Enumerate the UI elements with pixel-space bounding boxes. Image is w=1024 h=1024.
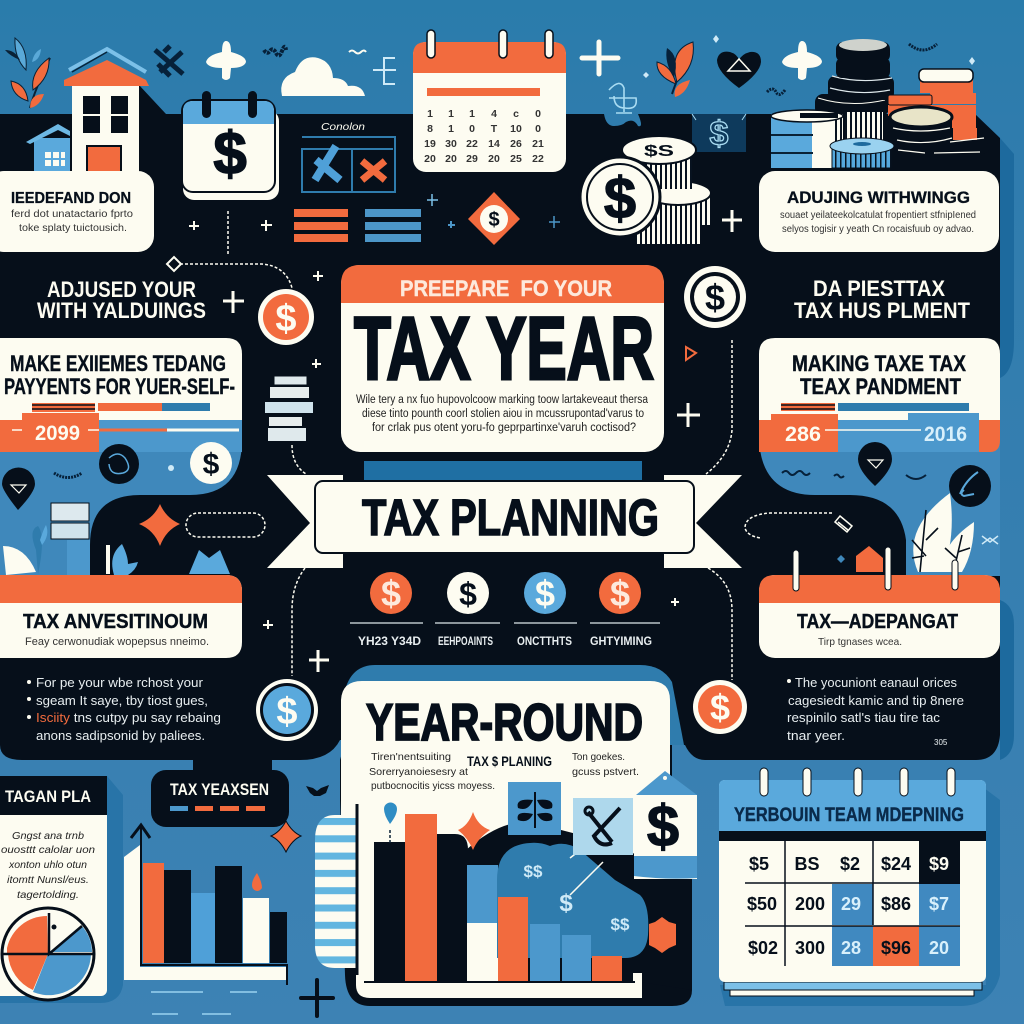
labels: ONCTTHTS	[517, 634, 572, 648]
bullet list right	[787, 675, 964, 747]
banner: tax planning	[267, 461, 742, 568]
subheading: TAX $ PLANING	[467, 753, 552, 769]
coin: orange: $	[381, 573, 401, 614]
panel: adjusting withholding: selyos togisir y yeath Cn rocaisfuub oy advao.	[782, 224, 974, 235]
icon: orange dollar coin: $	[275, 298, 297, 340]
icon: white dollar circle	[190, 442, 232, 484]
calendar: year-round table	[719, 768, 1000, 1006]
table values: $9	[929, 854, 949, 874]
icon: cloud	[281, 57, 365, 96]
heading: TAX ANVESITINOUM	[23, 611, 208, 633]
heading: MAKE EXIIEMES TEDANG	[10, 351, 226, 376]
heading: TAGAN PLA	[5, 787, 91, 806]
icon: orange four-point star	[139, 504, 180, 546]
icon: small squiggle right	[349, 50, 366, 54]
bar: year marker	[0, 403, 239, 452]
coin: white: $	[459, 576, 477, 612]
text block: xonton uhlo otun	[8, 859, 87, 871]
labels	[358, 634, 652, 648]
text block: Gngst ana trnb	[12, 830, 84, 842]
icon: orange dollar coin right: $	[710, 687, 730, 728]
chart: bars with cloud	[356, 802, 692, 998]
table values: 28	[841, 938, 861, 958]
icon: orange diamond dollar	[468, 192, 520, 245]
icon: large house	[64, 49, 149, 175]
calendar: top month: T	[491, 123, 498, 135]
icon: right coin stacks	[771, 39, 990, 168]
icon: small dots	[643, 35, 975, 78]
icon: small star	[271, 821, 301, 852]
text block left	[369, 751, 495, 792]
table values: BS	[794, 854, 820, 874]
icon: stripe block	[315, 815, 357, 968]
icon: small orange house	[856, 546, 883, 572]
banner: tax planning: TAX PLANNING	[362, 489, 659, 546]
heading: adjusted your: WITH YALDUINGS	[37, 298, 206, 323]
text block: for crlak pus otent yoru-fo geprpartinxe'varuh coctisod?	[372, 422, 636, 434]
small lines	[151, 992, 257, 1014]
icon: dollar calendar: $	[213, 120, 247, 187]
bar: year marker: 286	[785, 423, 821, 446]
table values: 200	[795, 894, 825, 914]
heading: TAX—ADEPANGAT	[797, 611, 958, 633]
icon: small blue dot	[837, 555, 845, 563]
calendar: top month: 1	[469, 108, 475, 120]
bar: year marker: 2016	[924, 423, 967, 446]
icon: orange dollar coin right	[693, 680, 747, 734]
connector lines	[180, 211, 832, 680]
icon: dollar tile: $	[710, 115, 729, 153]
calendar: top month: 4	[491, 108, 497, 120]
chart: bar chart left	[124, 821, 301, 985]
text block: souaet yeilateekolcatulat fropentiert stfnipIened	[780, 210, 976, 221]
calendar: top month: 1	[448, 108, 454, 120]
table cells	[832, 841, 960, 966]
icon: leaves in dark	[108, 544, 230, 575]
bars: orange and blue lists	[294, 209, 421, 242]
panel: comparison check and cross	[302, 122, 395, 192]
icon: scissors tile	[573, 798, 633, 855]
text block right: gcuss pstvert.	[572, 766, 639, 778]
icon: dark pin	[858, 442, 892, 486]
heading: MAKING TAXE TAX	[792, 351, 966, 376]
calendar: top month: 25	[510, 153, 522, 165]
panel: tax yeaxsen label	[151, 770, 289, 827]
icon: white leaves	[912, 493, 974, 572]
calendar: top month: 22	[466, 138, 478, 150]
calendar: top month: 14	[488, 138, 500, 150]
bullet list left: anons sadipsonid by paliees.	[36, 728, 205, 743]
icon: blue dollar coin: $	[276, 691, 298, 733]
stack: black coins	[815, 39, 894, 142]
heading: adjusted your	[37, 277, 206, 323]
coin: orange	[370, 572, 412, 614]
heading: IEEDEFAND DON	[11, 190, 131, 207]
coin: orange	[599, 572, 641, 614]
coin: blue	[524, 572, 566, 614]
icon: orange diamond dollar: $	[488, 209, 500, 231]
icon: plus sparkle	[582, 42, 618, 74]
coin: orange: $	[610, 573, 630, 614]
icon: dollar tile	[596, 114, 746, 153]
bar: year marker	[759, 403, 1000, 452]
text block: ouosttt calolar uon	[1, 844, 95, 856]
calendar: top month: 22	[532, 153, 544, 165]
calendar: top month: 21	[532, 138, 544, 150]
icon: light line glyph	[609, 83, 636, 113]
text block: Tirp tgnases wcea.	[818, 636, 902, 648]
icon: bat shape	[306, 785, 329, 796]
bullet list right: 305	[934, 738, 948, 747]
bullet list left: For pe your wbe rchost your	[36, 675, 204, 690]
bar: year marker: 2099	[35, 422, 80, 445]
calendar: top month: 0	[535, 123, 541, 135]
bullet list left	[27, 675, 221, 743]
coin: blue: $	[535, 573, 555, 614]
table values: $86	[881, 894, 911, 914]
text block: Feay cerwonudiak wopepsus nneimo.	[25, 636, 209, 648]
chart: bars with cloud: $$	[524, 862, 543, 881]
panel: tax investment left	[0, 575, 242, 658]
calendar: top month	[413, 30, 566, 172]
icon: euro-like glyph	[373, 58, 396, 84]
panel: making tax payment right: TEAX PANDMENT	[800, 374, 961, 399]
panel: making tax payment right	[759, 338, 1000, 576]
calendar: top month: 8	[427, 123, 433, 135]
calendar: top month: 29	[466, 153, 478, 165]
icon: orange leaf sprig	[657, 42, 693, 97]
icon: orange badge	[649, 917, 676, 953]
icon: small orange triangle	[686, 347, 696, 360]
heading: adjusted your: ADJUSED YOUR	[47, 277, 196, 302]
coin: white	[447, 572, 489, 614]
panel: adjusting withholding	[759, 171, 999, 252]
icon: dark cross	[301, 980, 333, 1016]
table values: $02	[748, 938, 778, 958]
calendar: top month: c	[513, 108, 519, 120]
bullet list left: sgeam It saye, tby tiost gues,	[36, 693, 208, 708]
stack: orange coins	[888, 69, 977, 140]
icon: small pin	[384, 802, 397, 843]
bullet list right: The yocuniont eanaul orices	[795, 675, 957, 690]
table values: 29	[841, 894, 861, 914]
icon: plant tile	[508, 782, 561, 835]
heading: tax payment: TAX HUS PLMENT	[794, 298, 971, 323]
icon: orange star	[458, 812, 490, 850]
table values: 300	[795, 938, 825, 958]
table values: 20	[929, 938, 949, 958]
calendar: top month: 20	[445, 153, 457, 165]
panel: info card top-left	[0, 171, 154, 252]
bullet list left: Isciity tns cutpy pu say rebaing	[36, 710, 221, 725]
text block	[1, 830, 95, 901]
calendar: top month: 0	[535, 108, 541, 120]
icon: outlined dollar coin	[684, 266, 746, 328]
labels: GHTYIMING	[590, 634, 652, 648]
table values: $24	[881, 854, 911, 874]
icon: left leaf sprig	[5, 38, 50, 108]
table values: $96	[881, 938, 911, 958]
heading: ADUJING WITHWINGG	[787, 188, 970, 207]
icon: small diamond marker	[167, 257, 181, 271]
icon: price tag dollar: $	[647, 794, 679, 859]
icon: coin stack with dollar: $S	[644, 143, 674, 160]
stack: front black coin	[890, 107, 990, 156]
text block: diese tinto pounth coorl stolien aiou in mcussrupontad'varus to	[362, 408, 644, 420]
table values: $7	[929, 894, 949, 914]
calendar: top month: 0	[469, 123, 475, 135]
labels: EEHPOAINTS	[438, 634, 493, 648]
bullet list right: tnar yeer.	[787, 728, 845, 743]
icon: dark circle	[99, 444, 139, 484]
text block right	[572, 751, 639, 778]
text block	[356, 394, 649, 434]
calendar: top month: 1	[448, 123, 454, 135]
icon: small blue house	[26, 124, 70, 172]
icon: white sparkle shape right	[782, 41, 822, 80]
icon: white dollar circle: $	[203, 448, 220, 481]
icon: blue dollar coin	[256, 679, 318, 741]
calendar: top month: 30	[445, 138, 457, 150]
panel: left plant and block	[3, 503, 230, 575]
table values: $50	[747, 894, 777, 914]
panel: tax yeaxsen label: TAX YEAXSEN	[170, 780, 269, 799]
panel: tax adepangat right	[759, 547, 1000, 658]
icon row: four dollar coins with labels	[350, 572, 660, 648]
panel: bottom-left pie card	[0, 776, 123, 1003]
rings	[760, 768, 955, 796]
calendar: top month: 26	[510, 138, 522, 150]
heading: YERBOUIN TEAM MDEPNING	[734, 805, 964, 826]
icon: coin stack with dollar	[580, 136, 711, 244]
icon: tiny coin stack	[265, 376, 313, 441]
icon: flame	[252, 873, 262, 891]
icon: dark circle with key	[949, 465, 991, 507]
icon: orange dollar coin	[258, 289, 314, 345]
heading: YEAR-ROUND	[366, 694, 643, 752]
calendar: top month: 20	[424, 153, 436, 165]
bullet list right: cagesiedt kamic and tip 8nere	[788, 693, 964, 708]
title: TAX YEAR	[354, 298, 654, 398]
calendar: top month: 10	[510, 123, 522, 135]
table values: $5	[749, 854, 769, 874]
cloud	[497, 843, 648, 958]
chart: pie	[1, 908, 94, 1000]
icon: outlined dollar coin: $	[705, 277, 725, 318]
heading: tax payment	[794, 276, 971, 323]
text block: itomtt Nunsl/eus.	[7, 874, 89, 886]
panel: info card top-left: toke splaty tuictousich.	[19, 223, 127, 234]
text block: Wile tery a nx fuo hupovolcoow marking toow lartakeveaut thersa	[356, 394, 649, 406]
text block: ferd dot unatactario fprto	[11, 209, 133, 220]
panel: estimated payments left	[0, 338, 242, 578]
calendar: top month: 1	[427, 108, 433, 120]
table values	[747, 854, 949, 958]
icon: dark heart	[717, 52, 761, 88]
chart: bars with cloud: $	[559, 890, 573, 917]
decorative pluses	[189, 194, 742, 672]
icon: dark pin	[2, 468, 35, 510]
heading: PREEPARE FO YOUR	[400, 276, 612, 301]
icon: coin stack with dollar: $	[604, 166, 636, 231]
panel: estimated payments left: PAYYENTS FOR YUER-SELF-	[4, 374, 235, 399]
icon: dark scribbles	[767, 44, 937, 95]
panel: central title card	[341, 265, 664, 452]
text block left: Tiren'nentsuiting	[371, 751, 451, 763]
icon: white sparkle shape left	[206, 41, 246, 80]
text block: tagertolding.	[17, 889, 79, 901]
panel: year-round planning	[315, 665, 697, 998]
labels: YH23 Y34D	[358, 634, 421, 648]
bullet list right: respinilo satl's tiau tire tac	[787, 710, 941, 725]
icon: small arrow stripes	[835, 516, 852, 532]
table values: $2	[840, 854, 860, 874]
text block left: Sorerryanoiesesry at	[369, 766, 468, 778]
icon: dollar calendar	[182, 91, 279, 200]
icon: price tag dollar	[634, 771, 697, 879]
panel: comparison check and cross: Conolon	[321, 122, 366, 133]
heading: tax payment: DA PIESTTAX	[813, 276, 945, 301]
calendar: top month: 19	[424, 138, 436, 150]
icon: crossed tools	[155, 46, 183, 76]
text block right: Ton goekes.	[572, 751, 625, 763]
icon: small squiggle left	[264, 47, 286, 56]
calendar: top month: 20	[488, 153, 500, 165]
scattered top icons	[5, 35, 975, 175]
chart: bars with cloud: $$	[611, 915, 630, 934]
stack: blue and white cylinder	[771, 110, 894, 168]
text block left: putbocnocitis yicss moyess.	[371, 780, 495, 792]
